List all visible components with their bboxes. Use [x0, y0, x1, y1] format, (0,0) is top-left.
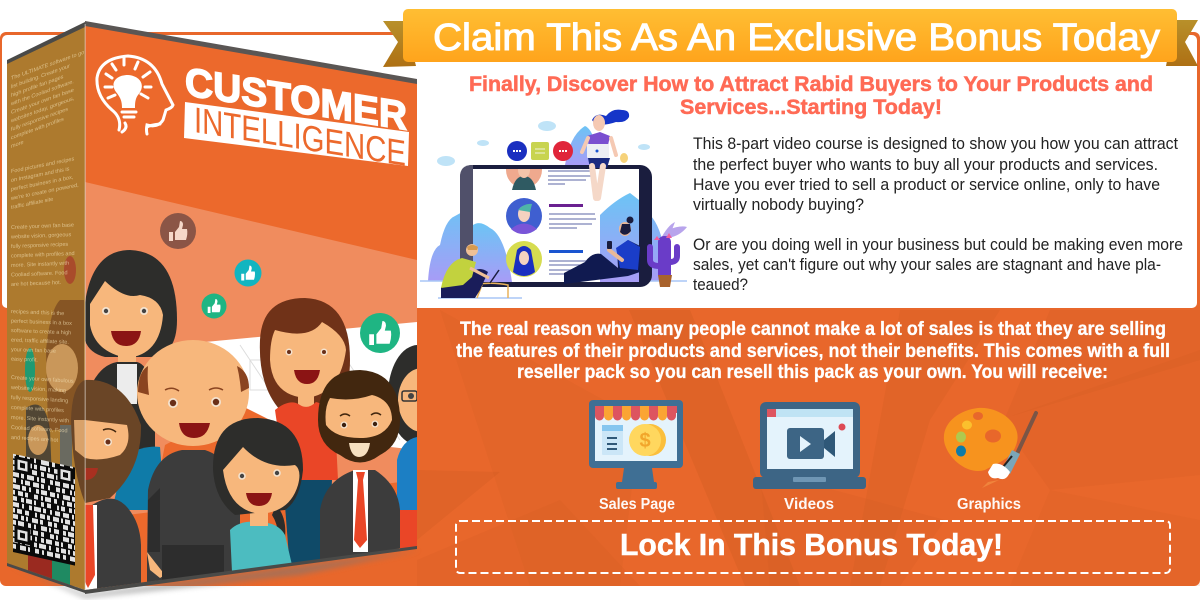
body copy: Or are you doing well in your business but could be making even more	[693, 236, 1183, 254]
thumbs-up badges	[160, 213, 400, 353]
body copy: sales, yet can't figure out why your sales are stagnant and have pla-	[693, 256, 1161, 274]
box side text: we're to create on powered,	[10, 182, 79, 202]
heading: Services...Starting Today!	[680, 96, 942, 119]
box side text: websites today, gorgeous,	[10, 96, 75, 125]
body copy: teaued?	[693, 276, 748, 294]
box side text: ered, traffic affiliate site.	[11, 338, 69, 346]
intro text on orange: reseller pack so you can resell this pack as your own. You will receive:	[517, 362, 1108, 383]
box side text: fully responsive landing	[11, 395, 68, 404]
chick	[620, 153, 628, 163]
bearded man right	[318, 370, 400, 570]
box side text: recipes and this is the	[11, 309, 64, 317]
logo: INTELLIGENCE band	[184, 102, 409, 166]
box side text: Food pictures and recipes	[11, 156, 74, 175]
box side text: complete with profiles	[11, 405, 64, 414]
tablet	[460, 165, 652, 287]
icon: sales page monitor: $	[639, 430, 651, 452]
box side text: and recipes are hot	[11, 435, 59, 444]
box side text: are hot because hot.	[11, 280, 62, 288]
box side text: Create your own fan base	[11, 88, 74, 116]
bearded man left (front portion)	[83, 380, 141, 590]
chat icons	[507, 141, 527, 161]
box side text: Cooliad software, Food	[11, 425, 68, 434]
blue-shirted person behind	[114, 446, 162, 510]
box side text: The ULTIMATE software to go	[11, 50, 84, 82]
body copy	[693, 135, 1183, 294]
cactus	[650, 222, 687, 287]
body copy: Have you ever tried to sell a product or service online, only to have	[693, 176, 1160, 194]
box side text: complete with profiles	[11, 117, 64, 141]
intro text on orange	[456, 319, 1170, 383]
woman with long brown hair	[260, 298, 350, 570]
ribbon tail: right	[1166, 20, 1198, 66]
man sitting right	[564, 216, 640, 284]
box edges	[7, 21, 417, 594]
body copy: the perfect buyer who wants to buy all your products and services.	[693, 156, 1158, 174]
box logo	[97, 56, 409, 174]
body copy: This 8-part video course is designed to show you how you can attract	[693, 135, 1178, 153]
icon labels: Videos	[784, 496, 834, 513]
icon labels	[599, 496, 1021, 513]
box side text: complete with profiles and	[11, 251, 75, 259]
box side text: on Instagram and this is	[11, 166, 70, 184]
bald man	[137, 340, 269, 582]
ribbon tail: left	[383, 21, 416, 67]
heading	[469, 73, 1153, 119]
white band	[205, 322, 417, 450]
box side text: more. Site instantly with	[11, 261, 69, 269]
heading: Finally, Discover How to Attract Rabid Buyers to Your Products and	[469, 73, 1153, 96]
box side panel	[7, 27, 85, 590]
box side text: fully responsive recipes	[11, 107, 68, 133]
box side text: easy profit.	[11, 357, 38, 364]
woman in front centre	[213, 418, 303, 572]
box side text: high profile fan pages	[11, 74, 64, 99]
call to action dashed box: Lock In This Bonus Today!	[620, 527, 1003, 562]
blobs behind tablet	[428, 126, 668, 281]
box side text: with the Cooliad software.	[10, 79, 74, 108]
box side text: list building. Create your	[11, 63, 70, 90]
woman at top left	[83, 250, 177, 460]
box front panel	[85, 26, 417, 590]
title ribbon	[403, 9, 1177, 62]
box side text	[10, 50, 84, 445]
box side text: fully responsive recipes	[11, 242, 68, 250]
logo: head with light bulb	[97, 56, 173, 134]
box side text: Cooliad software. Food	[11, 270, 68, 278]
icon: sales page monitor	[589, 400, 683, 489]
call to action dashed box	[456, 521, 1170, 573]
far right man with glasses	[389, 345, 417, 548]
box side text: Create your own fabulous	[11, 375, 74, 385]
profile text lines	[548, 171, 596, 274]
product box	[0, 20, 448, 600]
icon: graphics palette and brush	[944, 408, 1036, 488]
box side text: your own fan base	[11, 347, 56, 355]
icon: videos laptop	[753, 402, 866, 489]
body copy: virtually nobody buying?	[693, 196, 864, 214]
intro text on orange: the features of their products and services, not their benefits. This comes with a full	[456, 341, 1170, 362]
box side text: perfect business in a box,	[11, 174, 74, 193]
logo: INTELLIGENCE: INTELLIGENCE	[194, 99, 406, 174]
man sitting left	[441, 244, 508, 298]
clouds	[437, 121, 650, 201]
ground line	[420, 281, 687, 298]
box side text: more	[11, 140, 23, 150]
woman sitting on tablet	[582, 110, 629, 198]
profile avatars	[506, 169, 542, 184]
box side text: Create your own fan base	[11, 222, 74, 231]
logo: CUSTOMER: CUSTOMER	[185, 59, 407, 139]
illustration: people browsing profiles on a tablet	[420, 110, 687, 298]
title: Claim This As An Exclusive Bonus Today	[433, 17, 1160, 59]
bearded man left (on side panel)	[71, 380, 85, 503]
icon labels: Graphics	[957, 496, 1021, 513]
icon labels: Sales Page	[599, 496, 675, 513]
box side text: perfect business in a box	[11, 319, 72, 327]
box side text: software to create a high	[11, 328, 71, 336]
QR code	[13, 454, 75, 566]
box side text: website vision, making	[10, 385, 66, 394]
intro text on orange: The real reason why many people cannot make a lot of sales is that they are selling	[460, 319, 1166, 340]
product box shadow	[10, 550, 420, 598]
box side text: traffic affiliate site	[11, 197, 53, 211]
box side text: website vision, gorgeous	[10, 232, 71, 241]
box side text: more. Site instantly with	[11, 415, 69, 424]
